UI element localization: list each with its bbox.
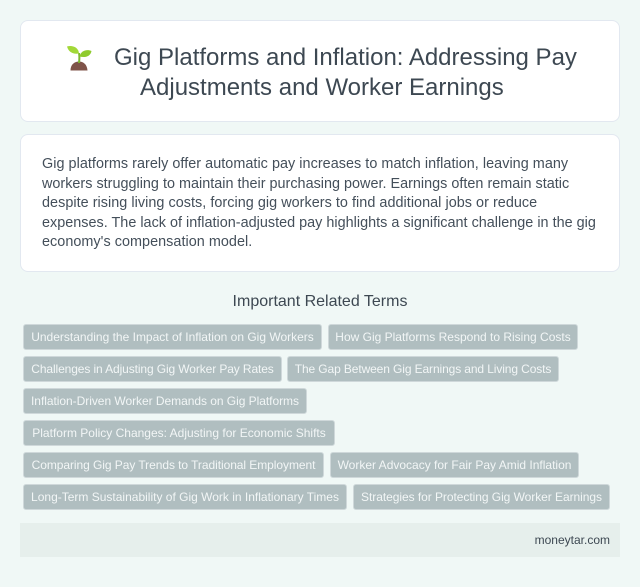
tag 2	[328, 324, 578, 350]
tag 10: Strategies for Protecting Gig Worker Earnings	[361, 490, 602, 504]
tag 5	[23, 388, 307, 414]
tag 7: Comparing Gig Pay Trends to Traditional Employment	[32, 458, 315, 472]
heading: title line 2: Adjustments and Worker Earnings	[140, 74, 504, 101]
tag 7	[23, 452, 324, 478]
panel: title card	[20, 20, 620, 122]
tag 1: Understanding the Impact of Inflation on Gig Workers	[31, 330, 314, 344]
tag 4	[287, 356, 559, 382]
text: description line 5: economy's compensation model.	[42, 234, 252, 250]
tag 10	[353, 484, 610, 510]
heading: title line 1: Gig Platforms and Inflation: Addressing Pay	[114, 44, 577, 71]
tag 5: Inflation-Driven Worker Demands on Gig Platforms	[31, 394, 299, 408]
tag 2: How Gig Platforms Respond to Rising Costs	[335, 330, 571, 344]
tag 8: Worker Advocacy for Fair Pay Amid Inflation	[338, 458, 571, 472]
tag 6	[23, 420, 335, 446]
tag 4: The Gap Between Gig Earnings and Living Costs	[295, 362, 551, 376]
icon: sprout	[67, 46, 92, 70]
tag 6: Platform Policy Changes: Adjusting for Economic Shifts	[32, 426, 326, 440]
tag 9: Long-Term Sustainability of Gig Work in Inflationary Times	[31, 490, 339, 504]
heading: important related terms: Important Related Terms	[233, 293, 407, 310]
text: description line 1: Gig platforms rarely offer automatic pay increases to match inflation, leaving many	[42, 156, 568, 172]
tag 1	[23, 324, 322, 350]
footer	[20, 523, 620, 557]
tag 8	[330, 452, 579, 478]
footer text: moneytar.com	[535, 533, 610, 547]
tag 3	[23, 356, 282, 382]
panel: description card	[20, 134, 620, 272]
tag 9	[23, 484, 347, 510]
text: description line 2: workers struggling to maintain their purchasing power. Earnings often remain static	[42, 176, 569, 192]
text: description line 3: despite rising living costs, forcing gig workers to find additional jobs or reduce	[42, 195, 537, 211]
text: description line 4: expenses. The lack of inflation-adjusted pay highlights a significant challenge in the gig	[42, 215, 596, 231]
tag 3: Challenges in Adjusting Gig Worker Pay Rates	[31, 362, 274, 376]
